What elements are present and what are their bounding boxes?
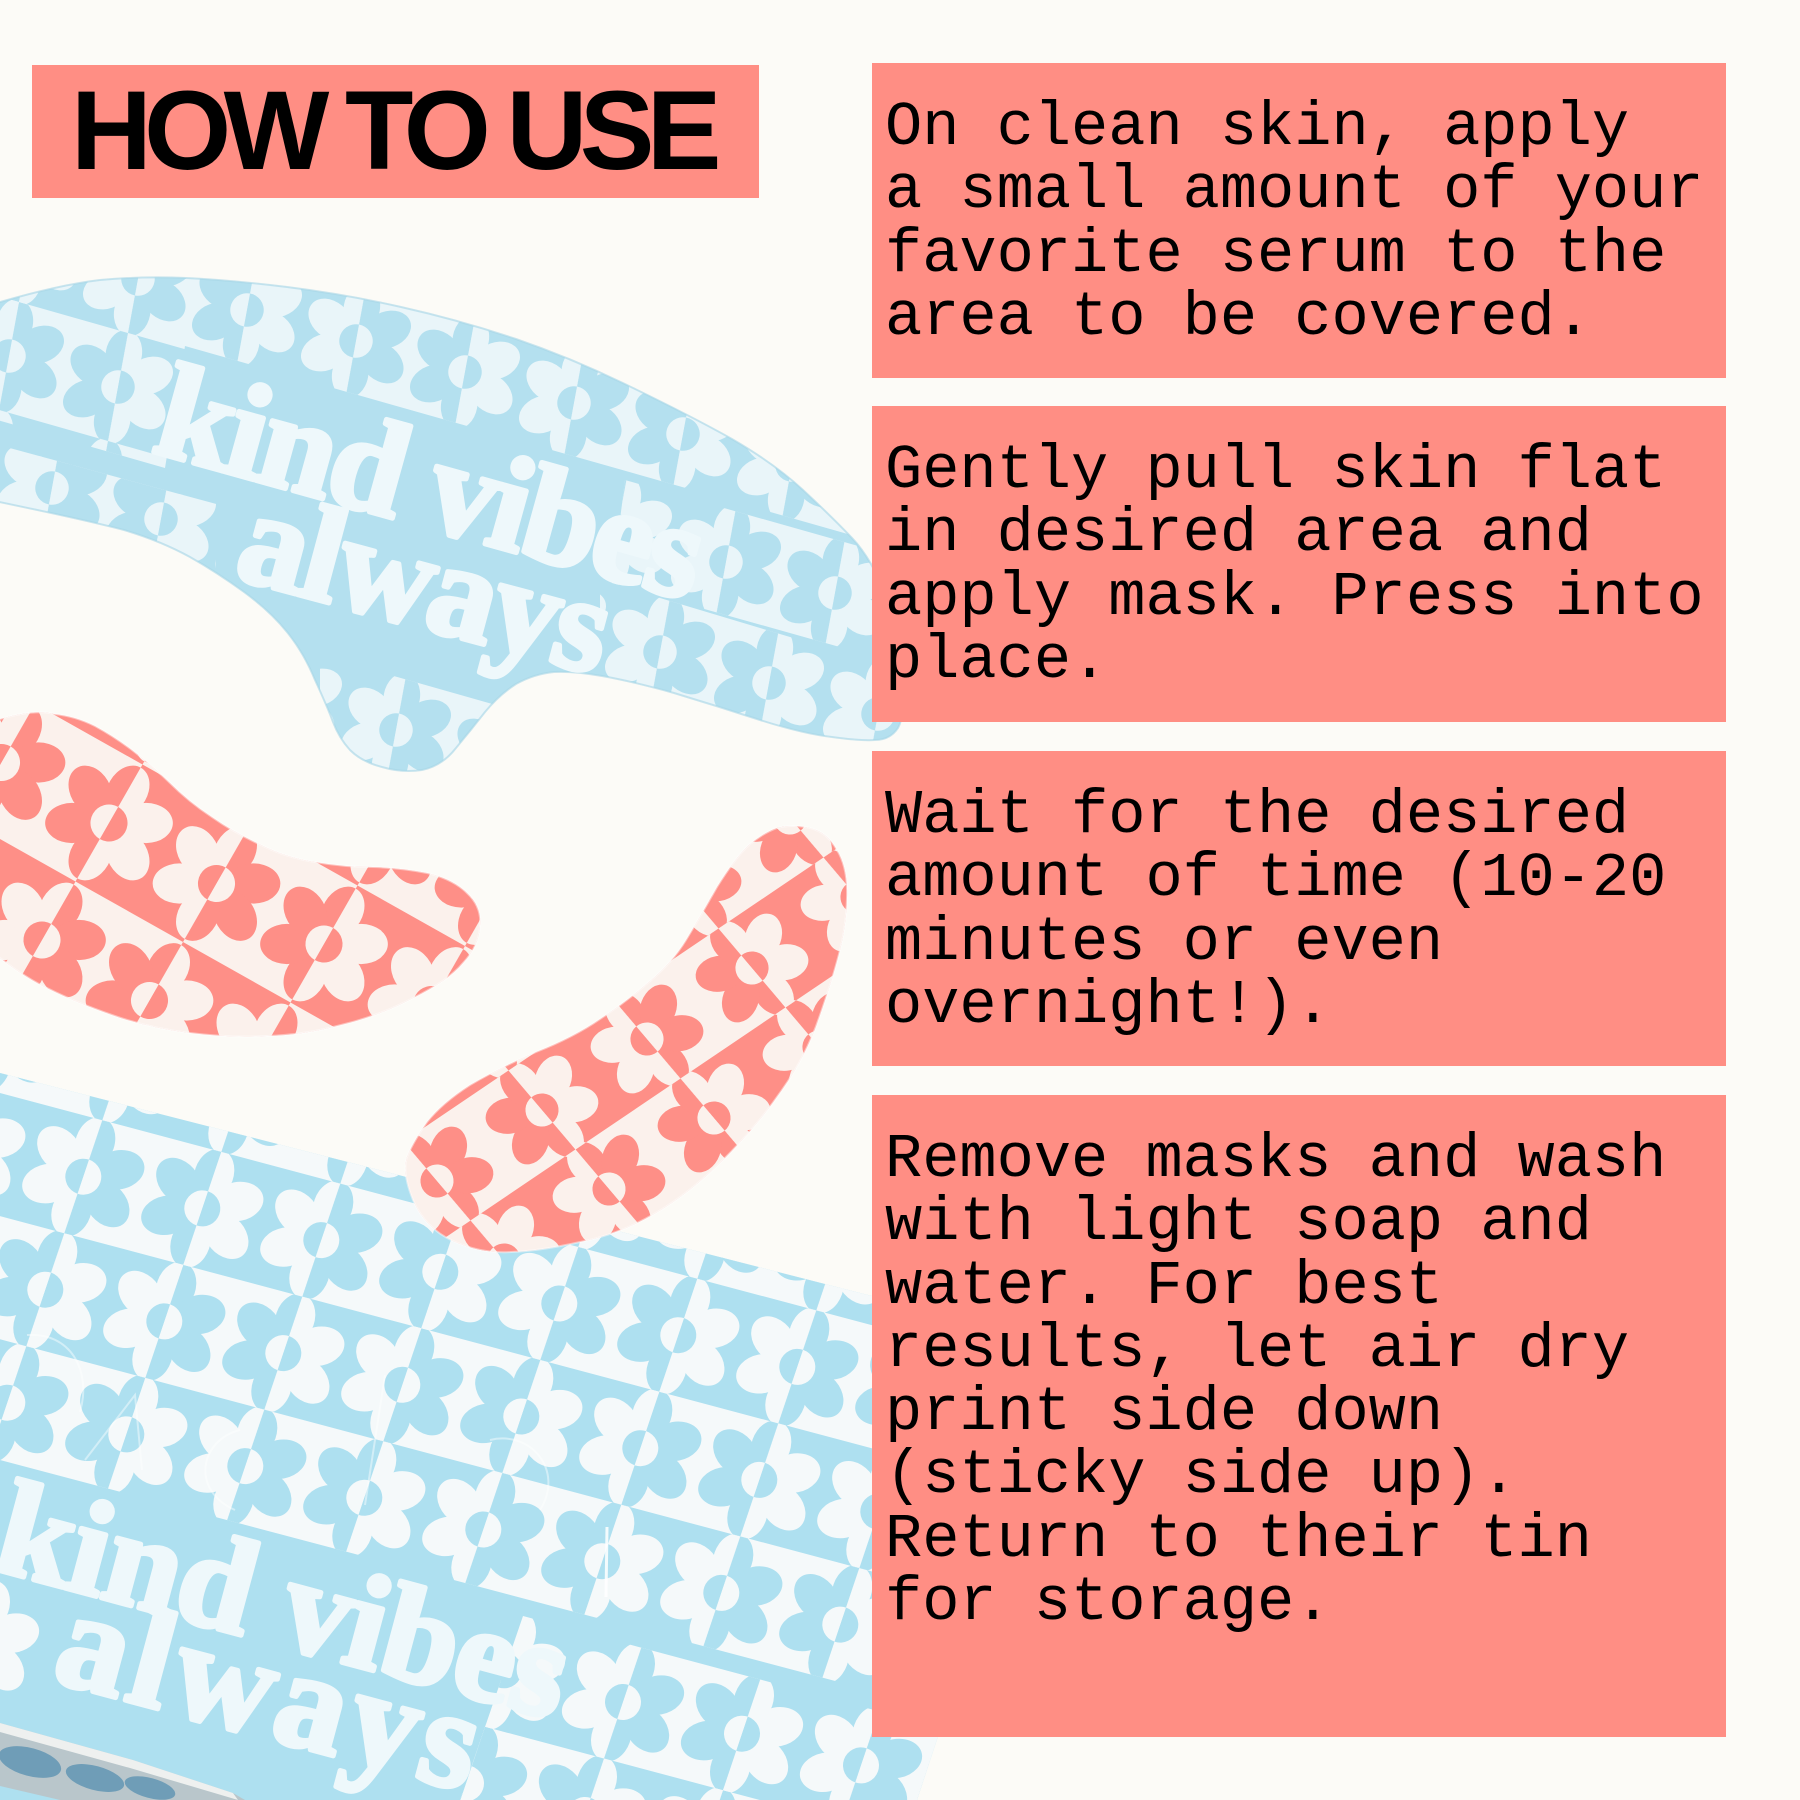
mask text: always: always [224,462,628,704]
step 2 panel: Gently pull skin flat in desired area and apply mask. Press into place. [885,435,1704,696]
tin with flower pattern [0,1073,938,1800]
title banner [32,65,759,198]
under-eye patch: left pink [0,712,480,1037]
tin text: kind vibes: kind vibes [0,1453,586,1748]
under-eye patch: right pink [405,826,848,1254]
heading: how to use: HOW TO USE [71,68,714,193]
step 4 panel: Remove masks and wash with light soap and water. For best results, let air dry print side down (sticky side up). Return to their tin for storage. [885,1124,1666,1638]
step 3 panel: Wait for the desired amount of time (10-20 minutes or even overnight!). [885,780,1666,1041]
product illustration: masks and tin [0,276,938,1800]
mask text: kind vibes: kind vibes [142,336,721,630]
eye mask: large blue forehead patch [0,276,902,772]
embossed logo on tin [27,1335,548,1510]
tin side edge [0,1723,245,1800]
tin highlight [606,1527,607,1597]
step 1 panel: On clean skin, apply a small amount of your favorite serum to the area to be covered. [885,92,1704,353]
